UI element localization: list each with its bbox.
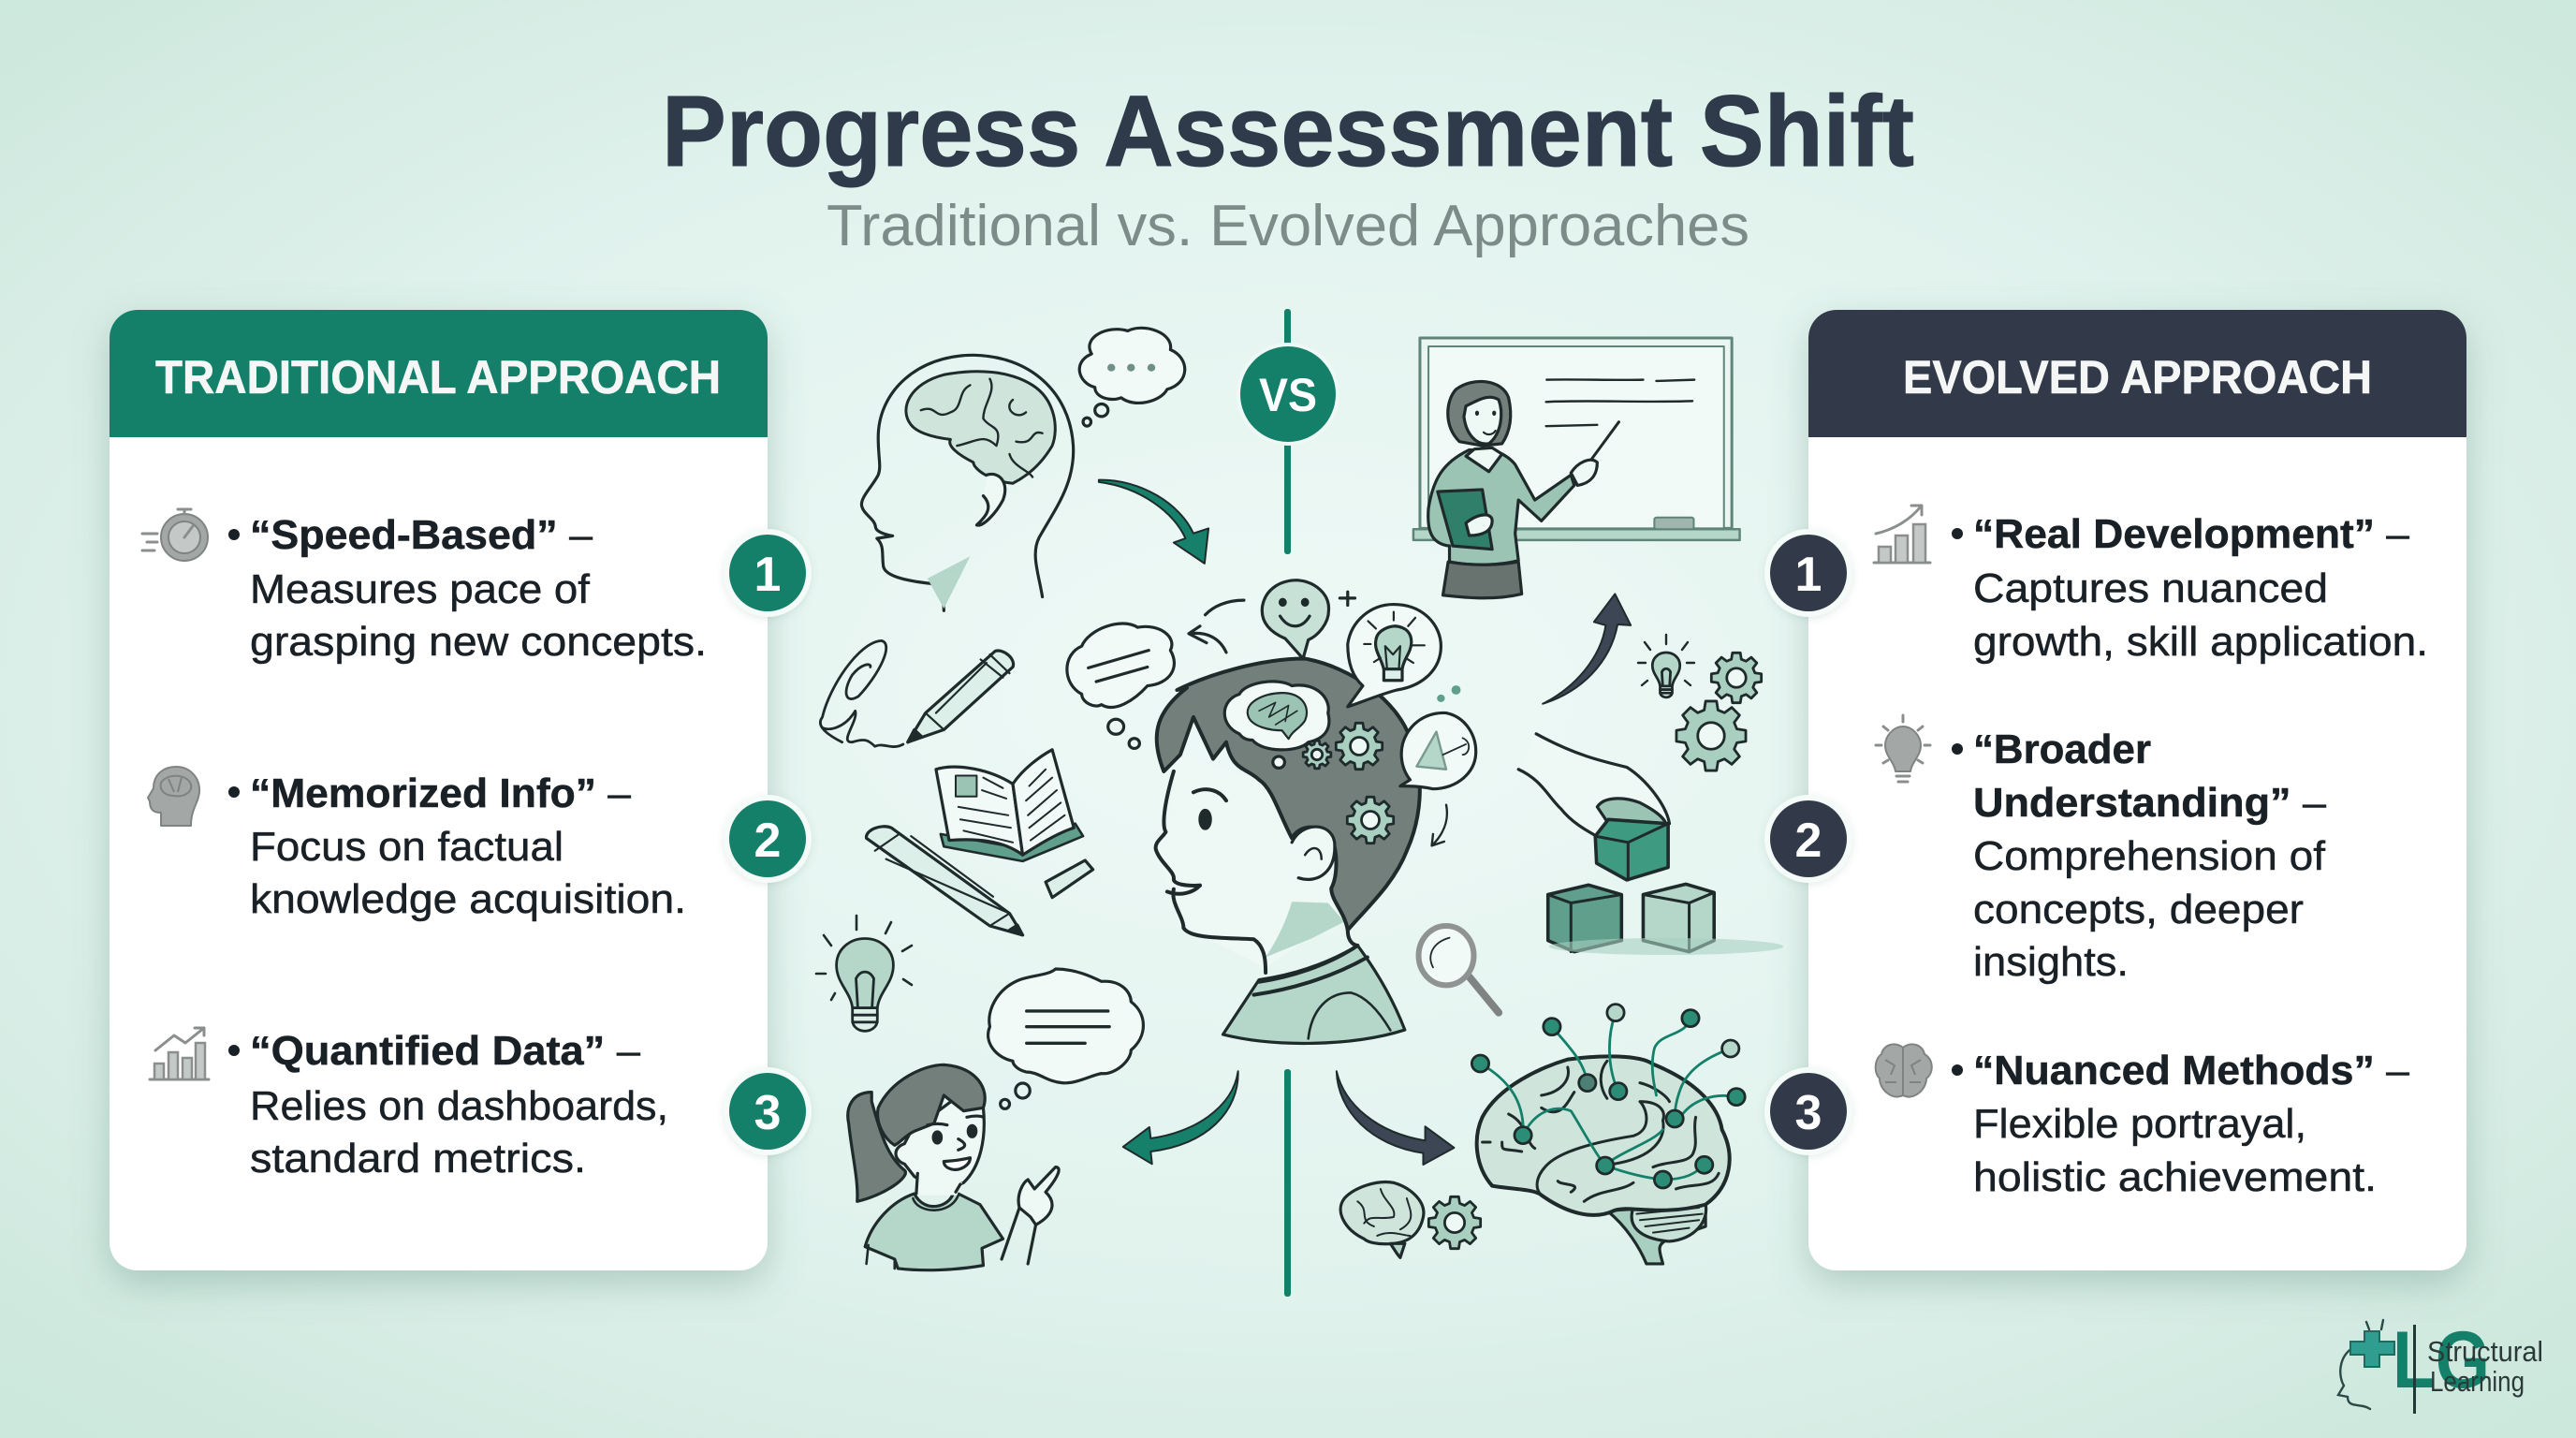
vs badge <box>1237 343 1339 446</box>
thought bubble: brain on head <box>1224 682 1329 768</box>
number badges: evolved <box>1764 529 1852 1155</box>
thought cloud: boy lines <box>1067 624 1174 748</box>
small brain <box>1340 1182 1424 1257</box>
hand placing block <box>1518 734 1670 843</box>
number badges: traditional: 1 <box>754 548 781 602</box>
block: light green <box>1643 884 1714 952</box>
speech bubble: light bulb <box>1348 605 1441 707</box>
illustrations upper (zoom-space coords) <box>820 328 1740 1043</box>
bullet 1: speed-based: “Speed-Based” – <box>250 512 593 558</box>
speech bubble: smiley <box>1189 580 1354 659</box>
gear: upper right <box>1711 653 1762 703</box>
head with brain <box>861 355 1074 610</box>
gear: lower right <box>1676 701 1746 770</box>
bullet 2: broader understanding: concepts, deeper <box>1973 887 2304 932</box>
big brain with network <box>1471 1005 1745 1264</box>
bullet 2: memorized info: knowledge acquisition. <box>250 876 686 922</box>
gears and bulbs <box>816 635 1762 1249</box>
number badges: evolved: 1 <box>1795 548 1822 602</box>
number badges: traditional: 3 <box>754 1086 781 1140</box>
magnifying glass <box>1419 926 1499 1013</box>
bullet 3: nuanced methods: “Nuanced Methods” – <box>1973 1048 2410 1093</box>
logo rule <box>2413 1325 2416 1414</box>
bullet 3: nuanced methods <box>1952 1048 2410 1200</box>
eraser <box>1046 860 1093 898</box>
bullet 1: speed-based <box>228 512 707 665</box>
number badges: evolved: 2 <box>1795 814 1822 868</box>
girl <box>848 1064 1059 1270</box>
icon: stopwatch <box>142 509 208 561</box>
bullet 1: real development: “Real Development” – <box>1973 511 2410 557</box>
bullet 3: quantified data: standard metrics. <box>250 1136 586 1181</box>
bullet 2: memorized info: Focus on factual <box>250 824 564 870</box>
logo text line 2: Learning <box>2430 1365 2525 1398</box>
bullet 1: speed-based: grasping new concepts. <box>250 619 707 665</box>
teacher <box>1428 381 1619 598</box>
speech bubble: triangle <box>1400 685 1476 845</box>
arrow: green down to boy <box>1099 480 1208 564</box>
icon: bar chart <box>150 1028 209 1079</box>
bullet 3: quantified data <box>228 1028 668 1181</box>
panel header: traditional <box>110 310 768 437</box>
panel: evolved approach <box>1808 310 2466 1270</box>
gear: on boy lower <box>1347 797 1394 844</box>
number badges: evolved: 3 <box>1795 1086 1822 1140</box>
thought cloud: girl <box>988 969 1143 1108</box>
block shadow <box>1549 938 1783 955</box>
gear: near small brain <box>1428 1196 1481 1249</box>
bullet 1: real development: Captures nuanced <box>1973 565 2328 611</box>
subtitle: Traditional vs. Evolved Approaches <box>827 194 1749 258</box>
heading: evolved approach: EVOLVED APPROACH <box>1903 351 2372 404</box>
gear: on boy large <box>1336 723 1383 770</box>
icon: light bulb <box>1876 715 1930 782</box>
panel header: evolved <box>1808 310 2466 437</box>
bullet 1: real development: growth, skill application. <box>1973 619 2428 665</box>
whiteboard <box>1413 338 1740 540</box>
bullet 1: speed-based: Measures pace of <box>250 566 591 612</box>
thought cloud with dots <box>1079 328 1185 426</box>
arrow: dark up to teacher <box>1543 594 1631 704</box>
open book <box>936 750 1083 861</box>
bullet 2: broader understanding: Comprehension of <box>1973 833 2326 879</box>
bulb: upper right <box>1638 635 1694 697</box>
bullet 2: memorized info: “Memorized Info” – <box>250 770 632 816</box>
illustrations lower (zoom-space coords) <box>848 926 1745 1270</box>
number badges: traditional: 2 <box>754 814 781 868</box>
gear: on boy small <box>1303 741 1331 769</box>
bullet 3: quantified data: Relies on dashboards, <box>250 1083 668 1129</box>
bullet 3: nuanced methods: Flexible portrayal, <box>1973 1101 2306 1147</box>
bullet 1: real development <box>1952 511 2428 665</box>
logo LG: LG <box>2393 1315 2490 1405</box>
bullet 2: broader understanding: insights. <box>1973 939 2129 985</box>
arrow: green to girl <box>1123 1071 1238 1164</box>
center divider top <box>1284 309 1291 554</box>
block: mid green <box>1548 885 1621 952</box>
bullet 2: memorized info <box>228 770 686 922</box>
number badges: traditional <box>724 529 812 1155</box>
logo text line 1: Structural <box>2427 1335 2543 1368</box>
icon: head with brain <box>148 767 199 826</box>
bullet 2: broader understanding: Understanding” – <box>1973 780 2327 826</box>
boy: face, hair and shirt <box>1156 659 1420 1043</box>
bullet 2: broader understanding <box>1952 726 2327 985</box>
bullet 3: nuanced methods: holistic achievement. <box>1973 1154 2377 1200</box>
bullet 3: quantified data: “Quantified Data” – <box>250 1028 641 1074</box>
vs badge: VS <box>1259 369 1317 421</box>
logo cross <box>2350 1331 2394 1367</box>
arrow: dark to brain <box>1337 1071 1454 1165</box>
logo: structural learning <box>2338 1315 2543 1414</box>
title: Progress Assessment Shift <box>662 74 1914 187</box>
center divider bottom <box>1284 1069 1291 1297</box>
block: green held <box>1595 819 1668 880</box>
panel: traditional approach <box>110 310 768 1270</box>
bullet 2: broader understanding: “Broader <box>1973 726 2151 772</box>
bulb: lower left <box>816 916 912 1031</box>
pencil lower <box>867 827 1023 935</box>
scribble <box>820 640 903 747</box>
heading: traditional approach: TRADITIONAL APPROACH <box>155 351 721 404</box>
icon: growth chart <box>1874 506 1930 563</box>
pencil upper <box>908 651 1014 742</box>
icon: brain <box>1876 1044 1932 1097</box>
